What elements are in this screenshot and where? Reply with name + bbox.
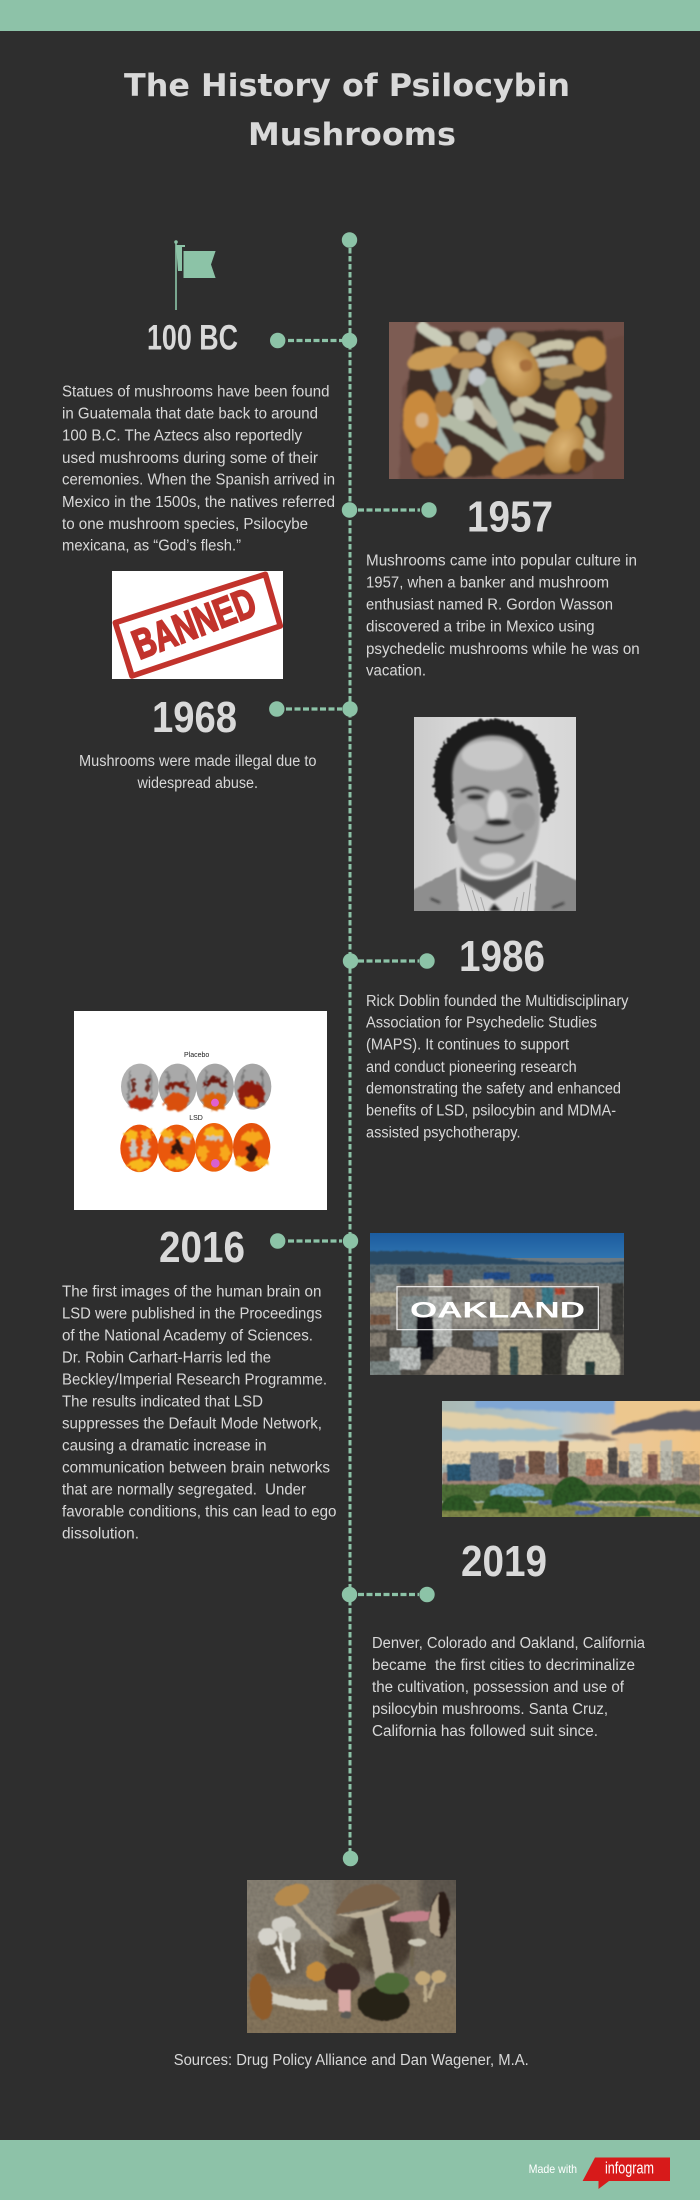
text: 2016: The first images of the human brain on <box>62 1284 321 1301</box>
text: 1986 <box>366 993 629 1142</box>
text: sources: Sources: Drug Policy Alliance and Dan Wagener, M.A. <box>174 2052 529 2069</box>
connector: 2019 <box>342 1587 435 1602</box>
text: 1957: discovered a tribe in Mexico using <box>366 619 595 636</box>
text: 1986: Rick Doblin founded the Multidisciplinary <box>366 993 629 1010</box>
text: 2019: California has followed suit since. <box>372 1723 598 1740</box>
connector: 1968 <box>269 701 358 717</box>
text: 2016 <box>62 1284 336 1542</box>
text: 1957: enthusiast named R. Gordon Wasson <box>366 597 613 614</box>
text: 1986: benefits of LSD, psilocybin and MDMA- <box>366 1103 616 1120</box>
connector: 100 BC <box>270 333 357 348</box>
text: 1986: (MAPS). It continues to support <box>366 1037 570 1054</box>
text: 2019: Denver, Colorado and Oakland, California <box>372 1635 645 1652</box>
text: 100 BC: 100 B.C. The Aztecs also reportedly <box>62 428 302 445</box>
text: 100 BC: used mushrooms during some of their <box>62 450 318 467</box>
bottom band <box>0 2140 700 2200</box>
text: 2016: of the National Academy of Sciences. <box>62 1328 313 1345</box>
photo: Denver skyline <box>442 1401 700 1517</box>
text: 1986: and conduct pioneering research <box>366 1059 577 1076</box>
photo: Rick Doblin portrait <box>414 717 576 911</box>
text: 1957: vacation. <box>366 663 426 680</box>
year: 1968: 1968 <box>152 693 237 742</box>
text: 1968 <box>79 753 316 792</box>
photo: Oakland skyline <box>370 1233 624 1375</box>
text: 100 BC: ceremonies. When the Spanish arrived in <box>62 472 335 489</box>
text: 2019: became the first cities to decriminalize <box>372 1657 635 1674</box>
image: brain scans <box>74 1011 327 1210</box>
text: 2016: LSD were published in the Proceedings <box>62 1305 322 1322</box>
text: 100 BC <box>62 383 335 555</box>
year: 100 BC: 100 BC <box>147 318 238 358</box>
connector: 1957 <box>342 502 437 518</box>
year: 1957: 1957 <box>467 492 553 542</box>
text: 2016: causing a dramatic increase in <box>62 1437 266 1454</box>
connector: 1986 <box>343 953 435 969</box>
text: 2016: suppresses the Default Mode Network, <box>62 1416 322 1433</box>
year: 2016: 2016 <box>159 1223 245 1272</box>
text: 2019 <box>372 1635 645 1740</box>
title: Mushrooms <box>248 117 456 153</box>
title: The History of Psilocybin <box>124 68 570 104</box>
text: 1986: Association for Psychedelic Studies <box>366 1014 597 1032</box>
text: 2016: that are normally segregated. Under <box>62 1481 306 1498</box>
credit: made with infogram: Made with <box>529 2162 577 2176</box>
text: 1957 <box>366 553 640 680</box>
text: 2016: favorable conditions, this can lead to ego <box>62 1504 336 1521</box>
logo: infogram <box>583 2158 670 2189</box>
credit: made with infogram <box>529 2158 670 2189</box>
text: 2016: dissolution. <box>62 1526 139 1542</box>
text: 2016: communication between brain networks <box>62 1460 330 1477</box>
timeline spine <box>342 232 358 1866</box>
text: 100 BC: Statues of mushrooms have been found <box>62 383 330 400</box>
text: 100 BC: mexicana, as “God’s flesh.” <box>62 538 241 555</box>
text: 100 BC: in Guatemala that date back to around <box>62 406 318 423</box>
text: 2016: The results indicated that LSD <box>62 1393 263 1410</box>
year: 2019: 2019 <box>461 1537 547 1586</box>
photo: Oakland skyline: OAKLAND <box>410 1298 585 1323</box>
year: 1986: 1986 <box>459 932 545 981</box>
text: 1957: 1957, when a banker and mushroom <box>366 574 609 591</box>
title <box>124 68 570 153</box>
image: brain scans: Placebo <box>184 1052 209 1059</box>
text: 2019: the cultivation, possession and use of <box>372 1679 625 1696</box>
text: 1968: Mushrooms were made illegal due to <box>79 753 316 770</box>
text: 100 BC: Mexico in the 1500s, the natives referred <box>62 494 335 511</box>
text: 2019: psilocybin mushrooms. Santa Cruz, <box>372 1701 608 1718</box>
text: 1986: demonstrating the safety and enhanced <box>366 1081 621 1098</box>
text: 2016: Dr. Robin Carhart-Harris led the <box>62 1349 271 1366</box>
text: 2016: Beckley/Imperial Research Programme. <box>62 1372 327 1389</box>
text: 1986: assisted psychotherapy. <box>366 1124 520 1142</box>
text: 100 BC: to one mushroom species, Psilocybe <box>62 516 308 533</box>
top band <box>0 0 700 31</box>
photo: basket of mushrooms <box>389 322 624 479</box>
photo: assorted wild mushrooms <box>247 1880 456 2033</box>
icon: flag <box>174 240 216 310</box>
text: 1957: Mushrooms came into popular culture in <box>366 553 637 570</box>
text: 1968: widespread abuse. <box>137 775 258 792</box>
logo: infogram: infogram <box>605 2158 654 2178</box>
connector: 2016 <box>270 1233 358 1249</box>
image: brain scans: LSD <box>189 1115 203 1122</box>
text: 1957: psychedelic mushrooms while he was on <box>366 641 640 658</box>
